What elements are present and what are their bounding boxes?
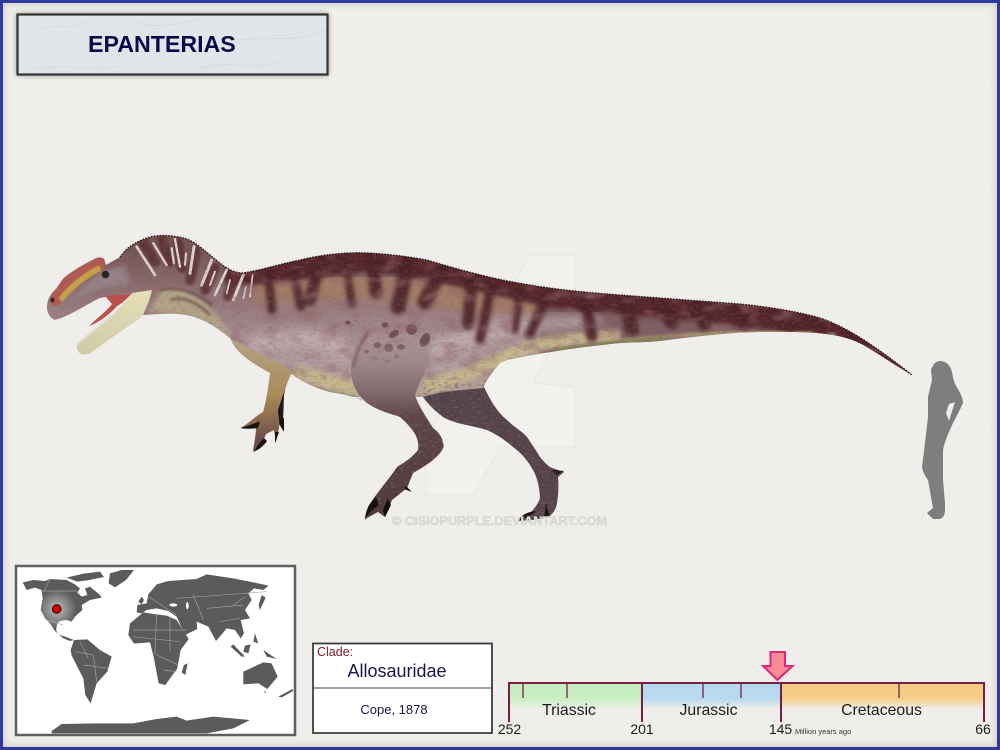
neck fold lines [160, 289, 212, 315]
leg skin texture [350, 380, 563, 520]
title text: EPANTERIAS [88, 31, 236, 57]
throat pale area [148, 288, 234, 338]
olive belly [285, 339, 670, 401]
country borders [43, 579, 267, 682]
crest yellow stripe [62, 269, 98, 298]
lower jaw teeth [78, 314, 112, 343]
hip crease [353, 332, 368, 368]
skull crest [50, 258, 105, 306]
tongue [89, 293, 132, 326]
upper jaw teeth [56, 299, 100, 321]
age labels [498, 721, 991, 737]
timeline chart [498, 683, 991, 737]
dark back stripes [268, 258, 868, 349]
age labels: 145 [769, 721, 792, 737]
dorsal serration [120, 236, 912, 375]
dinosaur body [47, 236, 912, 397]
far foot claws [518, 470, 564, 521]
near hind leg [351, 335, 444, 519]
clade author: Cope, 1878 [360, 702, 428, 717]
pale flank [250, 322, 600, 355]
illustration: dinosaur [40, 230, 920, 525]
age labels: 201 [630, 721, 654, 737]
panel: world map [16, 566, 295, 735]
lower jaw [77, 290, 152, 354]
neck white stripes [137, 239, 253, 300]
arrow: time marker [763, 652, 792, 680]
age labels: 66 [975, 721, 991, 737]
title panel [17, 14, 328, 75]
location glow [37, 589, 77, 629]
period labels: Cretaceous [841, 702, 922, 719]
period labels: Jurassic [680, 702, 738, 719]
near foot claws [365, 486, 412, 520]
dorsal dark band [225, 260, 912, 375]
forearm [230, 338, 292, 451]
unit label: Million years ago [795, 727, 851, 736]
hand claws [240, 418, 284, 452]
tail colouring [538, 306, 906, 371]
period labels [542, 702, 922, 719]
tail underside tan [620, 333, 835, 341]
nostril [50, 298, 54, 302]
period labels: Triassic [542, 702, 596, 719]
eye [102, 271, 109, 278]
inland seas [147, 602, 189, 612]
skin texture [40, 230, 920, 400]
flank spots [345, 307, 432, 364]
world land masses [23, 570, 293, 733]
far hind leg [423, 380, 564, 521]
mottled blotches [230, 250, 920, 380]
far arm [277, 365, 290, 432]
deviantart watermark logo [426, 255, 575, 495]
human scale silhouette [922, 361, 963, 519]
head shade [74, 264, 130, 298]
age labels: 252 [498, 721, 521, 737]
panel: clade [313, 644, 492, 733]
clade name: Allosauridae [347, 661, 447, 681]
belly cream band [295, 336, 620, 390]
watermark text: © CISIOPURPLE.DEVIANTART.COM [392, 516, 607, 528]
tan flank band [255, 284, 540, 306]
clade label: Clade: [317, 645, 353, 659]
neck dark patches [143, 240, 235, 296]
location marker [52, 605, 61, 613]
body shading, clipped to silhouette [40, 230, 920, 401]
